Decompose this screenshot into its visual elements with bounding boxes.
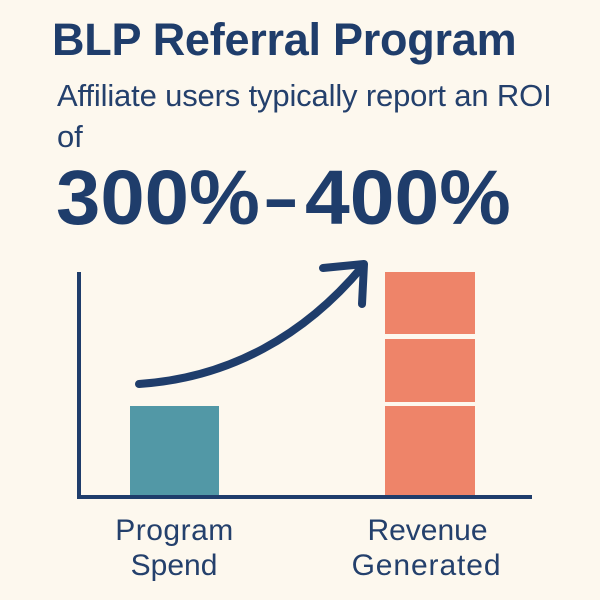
bar: revenue generated (385, 272, 475, 495)
big ROI number: 300% (56, 155, 260, 241)
label: program spend (115, 514, 234, 582)
big ROI number: – (265, 155, 297, 241)
big ROI number (56, 155, 511, 241)
label: program spend: Spend (131, 549, 217, 582)
title: BLP Referral Program (52, 14, 516, 65)
arrow (139, 264, 364, 384)
subtitle text (57, 78, 552, 154)
axes (79, 272, 532, 497)
subtitle text: of (57, 119, 83, 154)
bar: program spend (130, 406, 219, 495)
subtitle text: Affiliate users typically report an ROI (57, 78, 552, 113)
label: program spend: Program (115, 514, 234, 547)
label: revenue generated: Generated (352, 549, 501, 582)
big ROI number: 400% (305, 155, 511, 241)
label: revenue generated (352, 514, 501, 582)
label: revenue generated: Revenue (367, 514, 488, 547)
